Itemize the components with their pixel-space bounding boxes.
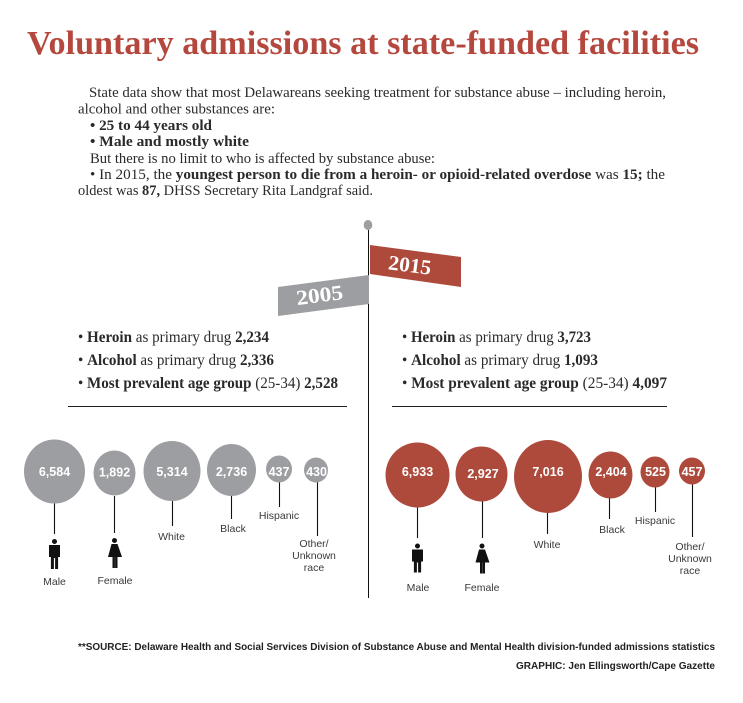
bubble: 2015 male	[386, 442, 450, 594]
2005 drug statistics: • Most prevalent age group (25-34) 2,528	[78, 375, 338, 392]
bubble: 2015 black: Black	[599, 524, 626, 536]
bubble: 2005 female	[94, 450, 136, 587]
bubble: 2005 other or unknown race: race	[304, 562, 324, 574]
signpost pole	[364, 220, 372, 598]
2005 drug statistics	[78, 329, 338, 392]
2015 bubble chart	[386, 440, 712, 594]
bubble: 2005 other or unknown race: 430	[306, 465, 327, 479]
bubble: 2015 white	[514, 440, 582, 551]
bubble: 2015 female: 2,927	[467, 467, 499, 481]
bubble: 2005 female: Female	[97, 575, 133, 587]
bubble: 2005 other or unknown race	[292, 458, 336, 574]
bubble: 2005 other or unknown race: Other/	[299, 538, 329, 550]
bubble: 2015 hispanic	[635, 456, 675, 527]
bubble: 2005 male	[24, 440, 85, 588]
2005 drug statistics: • Heroin as primary drug 2,234	[78, 329, 269, 346]
bubble: 2005 black	[207, 444, 256, 535]
bubble: 2015 other or unknown race: Unknown	[668, 553, 712, 565]
bubble: 2005 female: 1,892	[99, 466, 130, 480]
title: Voluntary admissions at state-funded facilities	[27, 25, 699, 62]
intro text block	[78, 85, 666, 199]
source credit: **SOURCE: Delaware Health and Social Services Division of Substance Abuse and Mental Health division-funded admissions statistics	[78, 641, 715, 653]
bubble: 2005 other or unknown race: Unknown	[292, 550, 336, 562]
flag: 2005: 2005	[295, 280, 344, 310]
bubble: 2015 male: 6,933	[402, 465, 433, 479]
bubble: 2005 hispanic	[259, 456, 299, 522]
bubble: 2005 white: 5,314	[156, 465, 188, 479]
intro text block: But there is no limit to who is affected by substance abuse:	[90, 151, 435, 167]
bubble: 2015 white: White	[534, 539, 561, 551]
bubble: 2015 other or unknown race: 457	[682, 465, 702, 479]
intro text block: • Male and mostly white	[90, 134, 249, 150]
bubble: 2005 white: White	[158, 531, 185, 543]
bubble: 2015 other or unknown race: Other/	[675, 541, 705, 553]
2015 drug statistics: • Alcohol as primary drug 1,093	[402, 352, 598, 369]
bubble: 2015 white: 7,016	[532, 465, 564, 479]
bubble: 2015 black: 2,404	[595, 465, 627, 479]
bubble: 2005 hispanic: 437	[269, 465, 289, 479]
bubble: 2015 female: Female	[464, 582, 500, 594]
intro text block: oldest was 87, DHSS Secretary Rita Landgraf said.	[78, 183, 373, 199]
bubble: 2015 black	[588, 452, 632, 536]
graphic credit: GRAPHIC: Jen Ellingsworth/Cape Gazette	[516, 660, 715, 672]
2015 drug statistics: • Heroin as primary drug 3,723	[402, 329, 591, 346]
bubble: 2015 male: Male	[407, 582, 430, 594]
bubble: 2005 male: 6,584	[39, 465, 70, 479]
2005 bubble chart	[24, 440, 336, 588]
bubble: 2005 male: Male	[43, 576, 66, 588]
bubble: 2005 white	[144, 441, 200, 543]
intro text block: alcohol and other substances are:	[78, 102, 275, 118]
bubble: 2015 hispanic: 525	[645, 465, 666, 479]
flag: 2015: 2015	[387, 250, 433, 280]
2015 drug statistics: • Most prevalent age group (25-34) 4,097	[402, 375, 667, 392]
bubble: 2015 other or unknown race	[668, 458, 712, 577]
intro text block: State data show that most Delawareans seeking treatment for substance abuse – including heroin,	[89, 85, 666, 101]
intro text block: • 25 to 44 years old	[90, 118, 213, 134]
intro text block: • In 2015, the youngest person to die from a heroin- or opioid-related overdose was 15; the	[90, 167, 665, 183]
flag: 2005	[278, 275, 369, 316]
bubble: 2015 other or unknown race: race	[680, 565, 700, 577]
bubble: 2005 black: 2,736	[216, 465, 247, 479]
bubble: 2015 female	[456, 446, 508, 594]
2005 drug statistics: • Alcohol as primary drug 2,336	[78, 352, 274, 369]
bubble: 2005 black: Black	[220, 523, 247, 535]
2015 drug statistics	[402, 329, 667, 392]
bubble: 2005 hispanic: Hispanic	[259, 510, 299, 522]
flag: 2015	[370, 245, 461, 287]
bubble: 2015 hispanic: Hispanic	[635, 515, 675, 527]
